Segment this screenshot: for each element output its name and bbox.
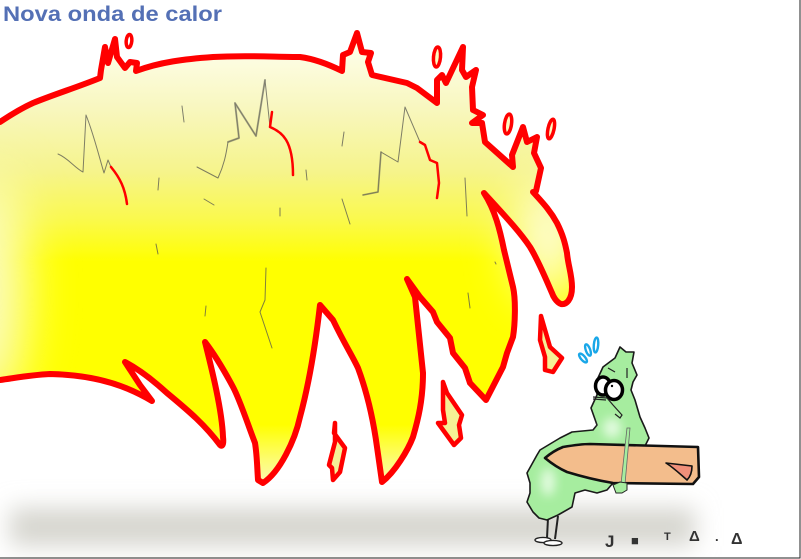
character: map-shaped figure surfing (527, 337, 699, 546)
falling flames (329, 316, 562, 480)
signature: J (605, 532, 614, 551)
hand (613, 482, 627, 493)
body highlights (541, 418, 621, 496)
signature: Δ (731, 531, 742, 548)
body (527, 347, 649, 520)
signature (605, 528, 742, 551)
eyes (596, 377, 622, 400)
surfboard (545, 444, 699, 484)
signature: T (664, 531, 671, 543)
sketch lines: peaks and marks (58, 80, 496, 348)
flying embers (126, 34, 556, 139)
heat wave red outline (0, 33, 572, 483)
sweat drops (578, 337, 599, 364)
red tails of sketch lines (111, 112, 439, 204)
legs and feet (535, 516, 562, 546)
signature: ■ (631, 533, 639, 548)
title: Nova onda de calor (3, 3, 222, 26)
arm (621, 428, 630, 484)
surfboard fin (666, 463, 692, 480)
heat wave flame fill (0, 30, 600, 489)
eyebrow and mouth (593, 368, 627, 418)
signature: . (715, 529, 719, 544)
ground shadow (10, 508, 695, 546)
signature: Δ (689, 528, 700, 545)
